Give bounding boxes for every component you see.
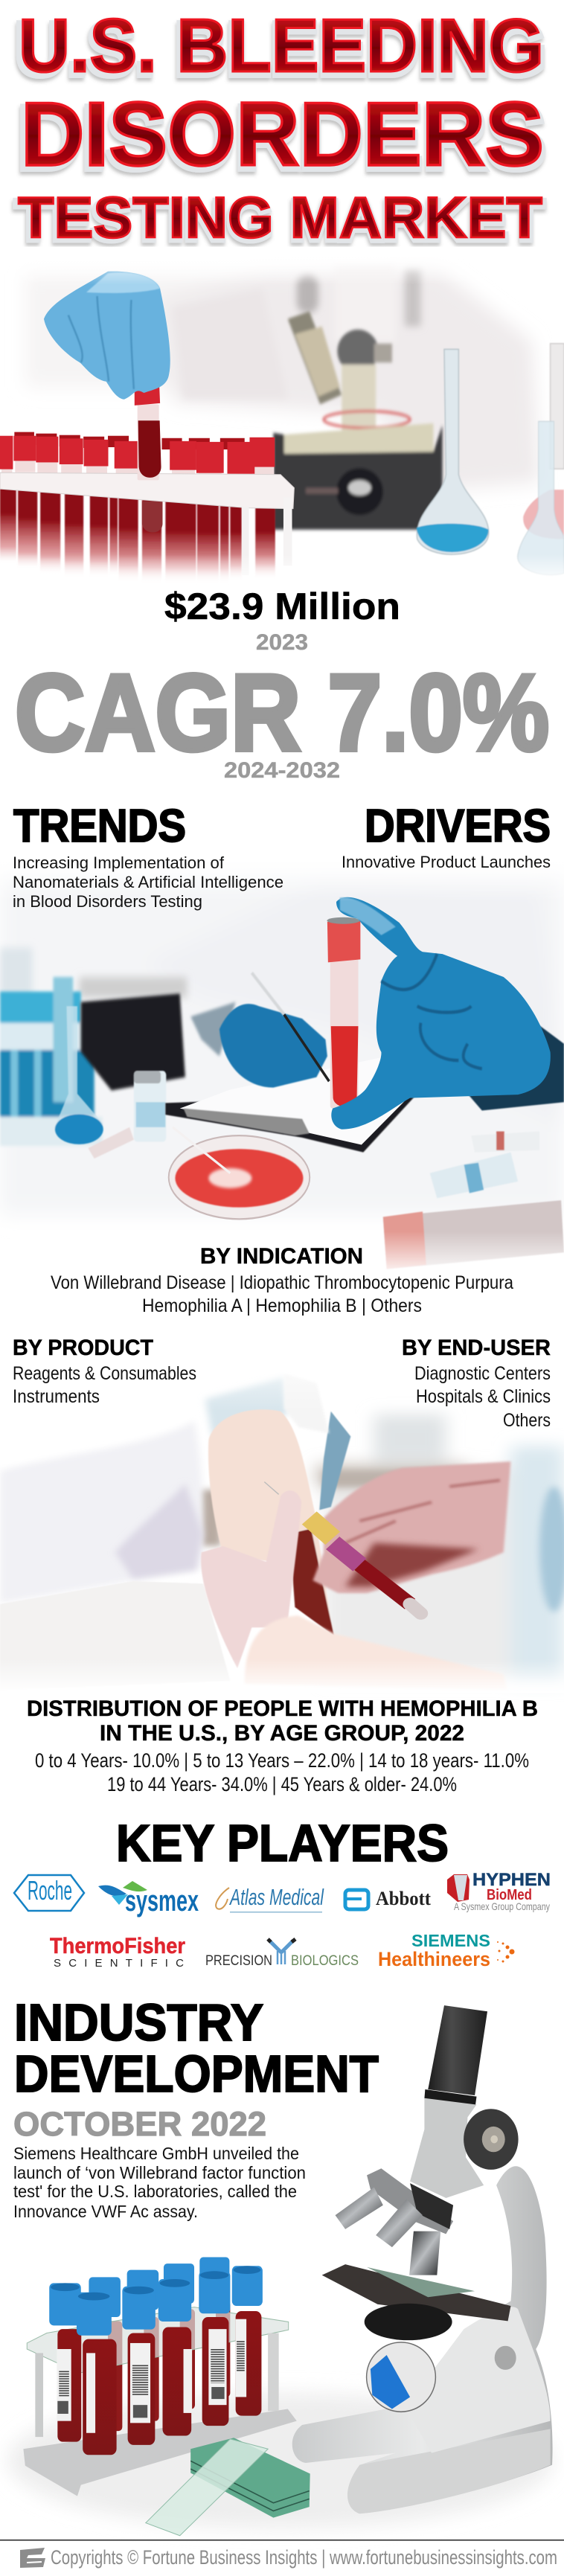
photo: scientist holding blood tube — [0, 848, 564, 1278]
logo: Siemens Healthineers — [378, 1931, 515, 1970]
by product list: Reagents & Consumables — [13, 1363, 196, 1384]
logo: Precision Biologics: BIOLOGICS — [291, 1953, 359, 1969]
big blue glove — [331, 897, 564, 1130]
market size value: $23.9 Million — [164, 586, 400, 627]
title line: Disorders: DISORDERS — [17, 87, 546, 188]
trends text — [13, 853, 283, 911]
heading: hemophilia distribution: IN THE U.S., BY AGE GROUP, 2022 — [100, 1721, 464, 1746]
development text: launch of ‘von Willebrand factor function — [13, 2163, 306, 2182]
heading: by product: BY PRODUCT — [13, 1336, 153, 1360]
trends text: in Blood Disorders Testing — [13, 892, 202, 911]
development text: Innovance VWF Ac assay. — [13, 2202, 198, 2221]
logo: Hyphen BioMed — [447, 1870, 551, 1912]
vacuum tube — [264, 1482, 421, 1613]
held tube — [135, 378, 161, 480]
microscope body — [292, 2166, 553, 2513]
heading: by end-user: BY END-USER — [402, 1336, 551, 1360]
bottom tube — [383, 1200, 564, 1269]
petri dish — [169, 1127, 310, 1219]
logo: Sysmex: sysmex — [125, 1885, 199, 1917]
glass slides — [146, 2438, 310, 2536]
heading: drivers: DRIVERS — [365, 801, 551, 852]
blue flask — [54, 1006, 103, 1144]
black box — [81, 993, 185, 1091]
by end-user list: Others — [503, 1410, 551, 1431]
photo: microscope, tube rack and slides — [7, 2005, 554, 2536]
flask: blue — [417, 349, 489, 554]
heading: key players: KEY PLAYERS — [116, 1814, 449, 1872]
by end-user list — [414, 1363, 551, 1431]
logo: Siemens Healthineers: SIEMENS — [411, 1931, 490, 1950]
tourniquet — [319, 1412, 350, 1510]
heading: industry development — [14, 1993, 379, 2103]
title line: Testing Market: TESTING MARKET — [15, 188, 545, 253]
photo: gloved hand picking blood tube from rack — [0, 247, 564, 585]
microscope head — [410, 2098, 484, 2198]
logo: Siemens Healthineers: Healthineers — [378, 1948, 490, 1970]
title line: U.S. Bleeding: U.S. BLEEDING — [19, 4, 544, 88]
rack tubes below rack — [0, 486, 275, 585]
footer: logo icon — [20, 2548, 45, 2568]
age distribution stats — [35, 1749, 529, 1795]
logo: Abbott: Abbott — [376, 1888, 431, 1909]
heading: hemophilia distribution: DISTRIBUTION OF PEOPLE WITH HEMOPHILIA B — [27, 1696, 538, 1721]
drivers text: Innovative Product Launches — [342, 853, 551, 871]
heading: by indication: BY INDICATION — [200, 1244, 363, 1269]
nosepiece and objectives — [367, 2168, 453, 2234]
heading: industry development: INDUSTRY — [14, 1993, 263, 2051]
by indication list — [51, 1272, 513, 1316]
logo: Thermo Fisher Scientific — [50, 1934, 185, 1970]
floor shadow — [7, 2393, 554, 2529]
heading: hemophilia distribution — [27, 1696, 538, 1746]
title — [15, 4, 546, 253]
trends text: Increasing Implementation of — [13, 853, 225, 872]
heading: industry development: DEVELOPMENT — [14, 2045, 379, 2103]
logo: Thermo Fisher Scientific: ThermoFisher — [50, 1934, 185, 1958]
blue test tube rack — [0, 977, 103, 1146]
stage — [322, 2264, 510, 2321]
title line: Testing Market: TESTING MARKET — [18, 185, 542, 250]
age distribution stats: 19 to 44 Years- 34.0% | 45 Years & older- 24.0% — [107, 1773, 457, 1795]
tube caps row — [0, 432, 275, 486]
logo: Abbott — [344, 1888, 431, 1909]
development text: Siemens Healthcare GmbH unveiled the — [13, 2144, 299, 2163]
development text — [13, 2144, 306, 2221]
by indication list: Hemophilia A | Hemophilia B | Others — [142, 1295, 422, 1316]
logo: Hyphen BioMed: BioMed — [487, 1887, 532, 1903]
market size year: 2023 — [256, 630, 308, 655]
rack top bar — [0, 472, 294, 509]
arm — [208, 1409, 334, 1635]
clipboard — [165, 1052, 417, 1153]
flask: right — [518, 344, 564, 575]
development text: test' for the U.S. laboratories, called the — [13, 2182, 297, 2201]
logo: Sysmex — [98, 1881, 199, 1917]
left blue glove and pen — [190, 973, 329, 1088]
right glove — [313, 1461, 510, 1593]
microscope — [292, 2005, 553, 2513]
logo: Atlas Medical — [216, 1884, 324, 1912]
left glove — [201, 1490, 307, 1668]
CAGR period: 2024-2032 — [224, 758, 340, 783]
title line: Disorders: DISORDERS — [21, 83, 544, 185]
by product list: Instruments — [13, 1386, 100, 1407]
mirror — [367, 2342, 435, 2412]
lower arm — [245, 1615, 507, 1691]
development date: OCTOBER 2022 — [13, 2105, 266, 2143]
bedding — [0, 1420, 230, 1691]
logo: Precision Biologics: PRECISION — [205, 1953, 272, 1969]
trends text: Nanomaterials & Artificial Intelligence — [13, 873, 283, 891]
by indication list: Von Willebrand Disease | Idiopathic Thrombocytopenic Purpura — [51, 1272, 513, 1293]
logo: Thermo Fisher Scientific: SCIENTIFIC — [54, 1957, 184, 1970]
title line: U.S. Bleeding: U.S. BLEEDING — [15, 8, 546, 92]
heading: trends: TRENDS — [13, 801, 186, 852]
glass rack plate — [27, 2307, 289, 2373]
logo: Hyphen BioMed: HYPHEN — [472, 1870, 551, 1890]
logo: Roche — [14, 1875, 84, 1911]
blue glove — [44, 272, 170, 400]
tube rack — [23, 2257, 297, 2496]
logo: Precision Biologics — [205, 1939, 359, 1969]
by product list — [13, 1363, 196, 1407]
logo: Roche: Roche — [28, 1875, 72, 1906]
photo: blood draw from arm — [0, 1336, 564, 1694]
vials — [88, 1071, 539, 1198]
logo: Atlas Medical: Atlas Medical — [229, 1884, 324, 1910]
front tubes — [49, 2266, 263, 2455]
back tubes — [89, 2257, 230, 2431]
big test tube — [327, 917, 360, 1109]
held tube lower end — [142, 501, 162, 533]
